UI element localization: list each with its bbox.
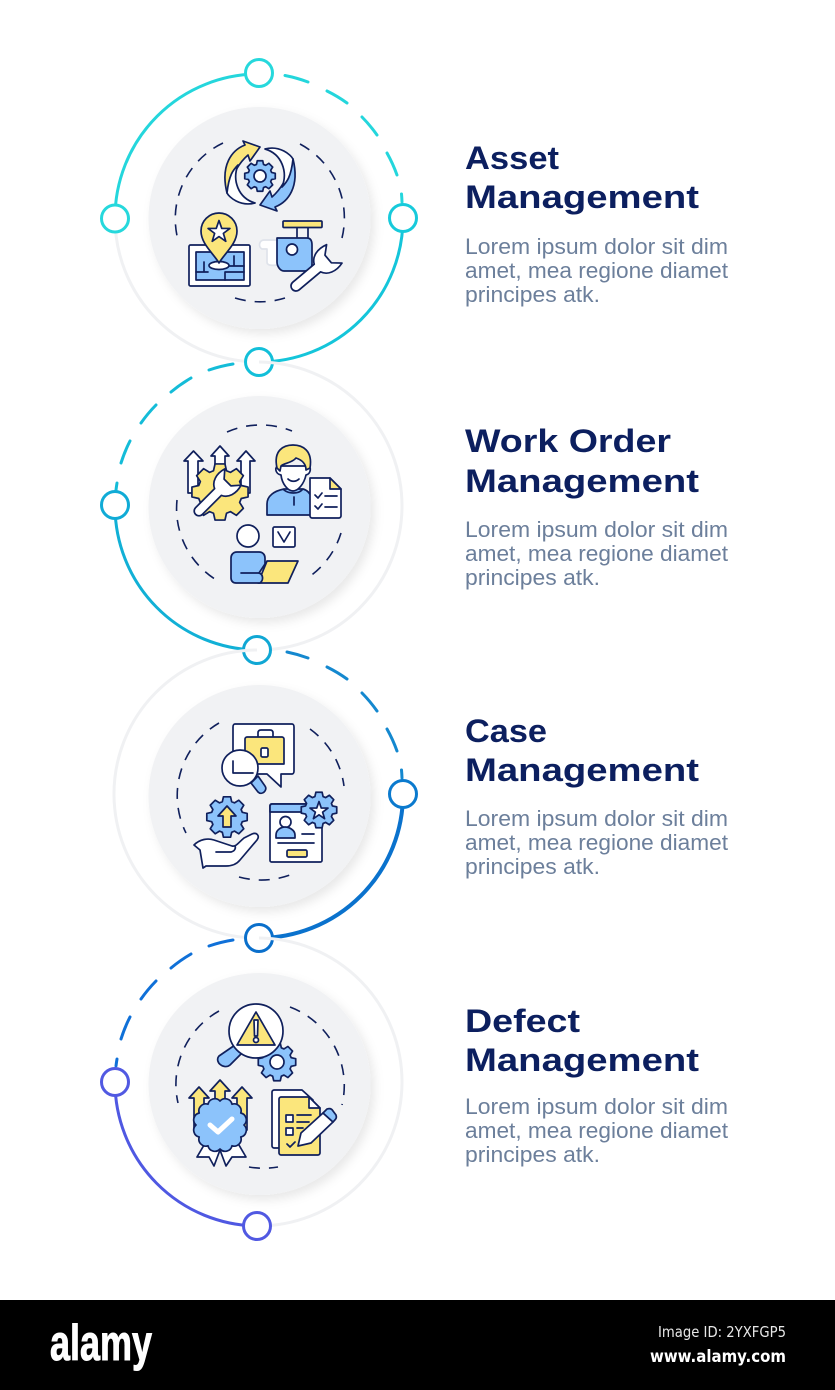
- description: amet, mea regione diamet: [465, 541, 729, 566]
- grey disc: [148, 685, 370, 907]
- faint ring: [257, 362, 402, 650]
- description: Lorem ipsum dolor sit dim: [465, 806, 728, 831]
- footer band: [0, 1300, 835, 1390]
- nodes: [102, 60, 416, 376]
- panel: work order management: [102, 362, 402, 664]
- description: Lorem ipsum dolor sit dim: [465, 234, 728, 259]
- solid arcs and dashes: [115, 940, 257, 1226]
- icon: badge with arrows: [189, 1080, 252, 1166]
- heading: Management: [465, 179, 699, 215]
- text: asset management: [465, 140, 729, 307]
- description: amet, mea regione diamet: [465, 1118, 729, 1143]
- text: defect management: [465, 1003, 729, 1167]
- grey disc: [148, 107, 370, 329]
- panel: case management: [114, 650, 417, 952]
- image id: Image ID: 2YXFGP5: [658, 1323, 786, 1341]
- solid arcs and dashes: [259, 652, 403, 938]
- faint ring: [115, 218, 259, 362]
- grey disc: [148, 396, 370, 618]
- icon: magnifier warning with gear: [218, 1004, 296, 1081]
- nodes: [246, 780, 416, 952]
- icon: person with document: [267, 445, 341, 518]
- website: www.alamy.com: [650, 1347, 786, 1367]
- text: work order management: [465, 423, 729, 590]
- nodes: [102, 492, 270, 664]
- description: Lorem ipsum dolor sit dim: [465, 517, 728, 542]
- description: amet, mea regione diamet: [465, 258, 729, 283]
- grey disc: [148, 973, 370, 1195]
- icon: gear with wrench and arrows: [184, 446, 255, 523]
- description: principes atk.: [465, 565, 600, 590]
- panel: asset management: [102, 60, 416, 376]
- alamy logo: alamy: [50, 1315, 152, 1371]
- heading: Defect: [465, 1003, 580, 1039]
- heading: Management: [465, 1042, 699, 1078]
- faint ring: [257, 938, 402, 1226]
- icon: gear on open hand: [194, 797, 258, 868]
- description: Lorem ipsum dolor sit dim: [465, 1094, 728, 1119]
- panel: defect management: [102, 938, 402, 1240]
- black bar: [0, 1300, 835, 1390]
- description: principes atk.: [465, 1142, 600, 1167]
- faint ring: [114, 650, 259, 938]
- icon: person at laptop: [231, 525, 298, 583]
- icon: engine with wrench: [260, 221, 343, 299]
- icon: cycle arrows with gear: [225, 141, 295, 211]
- solid arcs and dashes: [115, 364, 257, 650]
- icon: briefcase in chat bubble with magnifier: [222, 724, 294, 793]
- description: amet, mea regione diamet: [465, 830, 729, 855]
- dashed inner ring: [175, 143, 344, 302]
- dashed inner ring: [176, 1007, 344, 1168]
- description: principes atk.: [465, 282, 600, 307]
- heading: Management: [465, 752, 699, 788]
- solid arcs and dashes: [115, 74, 403, 362]
- icon: profile card with star gear: [270, 792, 337, 862]
- heading: Case: [465, 713, 547, 749]
- icon: documents with pencil: [272, 1090, 336, 1155]
- nodes: [102, 1068, 270, 1240]
- dashed inner ring: [177, 723, 344, 880]
- description: principes atk.: [465, 854, 600, 879]
- text: case management: [465, 713, 729, 879]
- heading: Asset: [465, 140, 559, 176]
- dashed inner ring: [177, 425, 341, 581]
- heading: Management: [465, 463, 699, 499]
- icon: map with pin: [189, 213, 250, 286]
- heading: Work Order: [465, 423, 671, 459]
